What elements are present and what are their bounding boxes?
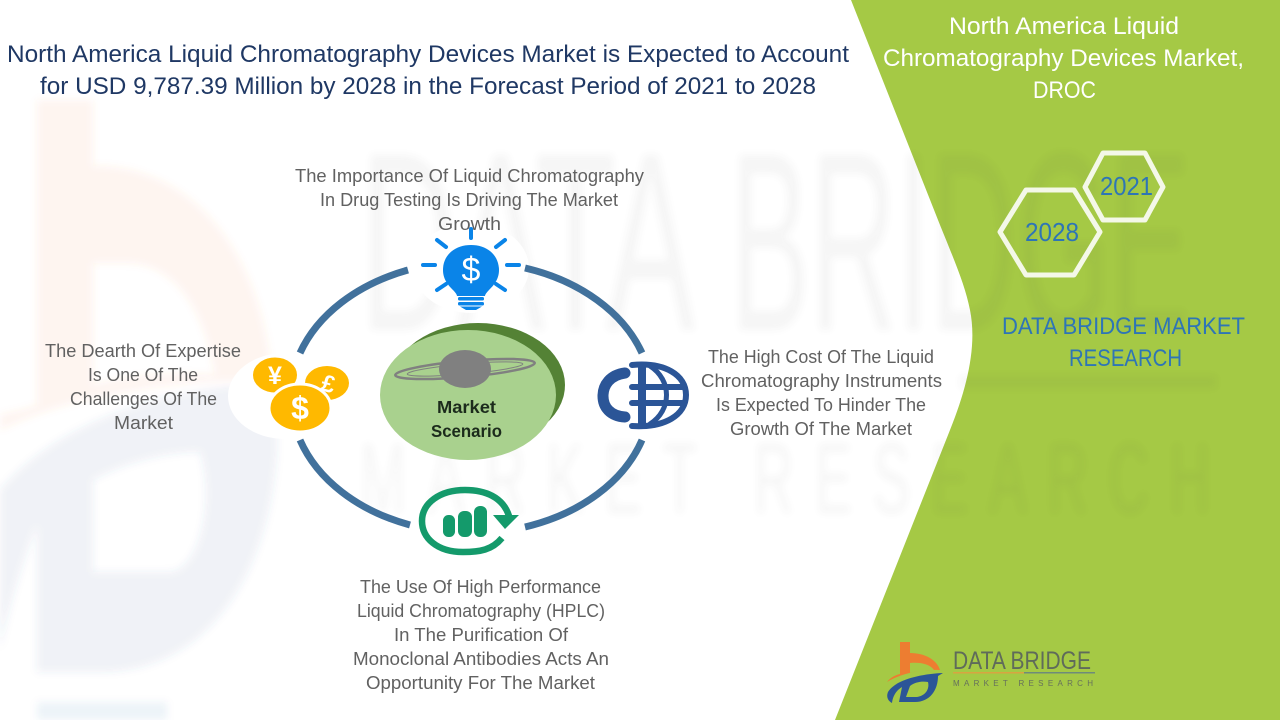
icon: coins (252, 356, 349, 432)
icon: hexagon 2028: 2028 (1025, 217, 1079, 247)
text: restraint: Is Expected To Hinder The (716, 395, 926, 415)
text: opportunity: The Use Of High Performance (360, 577, 601, 597)
company name text: DATA BRIDGE MARKET (1002, 313, 1245, 340)
icon: light bulb with dollar (423, 229, 519, 310)
text: opportunity: In The Purification Of (394, 625, 569, 645)
center: market scenario (380, 323, 565, 460)
watermark: company name (360, 100, 1216, 535)
icon: planet (395, 350, 535, 388)
watermark: large logo (0, 100, 277, 720)
text: opportunity: Opportunity For The Market (366, 673, 595, 693)
text: restraint: The High Cost Of The Liquid (708, 347, 934, 367)
text: restraint: Chromatography Instruments (701, 371, 942, 391)
text: opportunity (353, 577, 609, 693)
text: driver (295, 166, 644, 234)
icon: light bulb with dollar: $ (462, 251, 481, 289)
title (7, 41, 849, 100)
icon: phone and globe (603, 365, 686, 426)
icon: hexagon 2021: 2021 (1100, 171, 1153, 201)
white blob: icon backgrounds (228, 223, 697, 439)
logo: data bridge: DATA BRIDGE (953, 647, 1091, 675)
icon: chart with circular arrow (422, 490, 519, 552)
text: restraint (701, 347, 942, 439)
label: market scenario (431, 397, 502, 441)
text: challenge: Is One Of The (88, 365, 198, 385)
watermark: company name: MARKET RESEARCH (360, 424, 1210, 535)
text: driver: The Importance Of Liquid Chromatography (295, 166, 644, 186)
side panel heading: Chromatography Devices Market, (883, 45, 1244, 72)
text: challenge: Market (114, 413, 173, 433)
icon: coins: ¥ (268, 362, 282, 390)
icon: coins: £ (318, 370, 339, 399)
text: opportunity: Liquid Chromatography (HPLC) (357, 601, 605, 621)
ring: segmented ellipse (300, 268, 642, 527)
text: driver: Growth (438, 214, 501, 234)
title: for USD 9,787.39 Million by 2028 in the Forecast Period of 2021 to 2028 (40, 73, 816, 100)
icon: hexagon 2021 (1085, 153, 1163, 220)
label: market scenario: Scenario (431, 421, 502, 441)
side panel heading: North America Liquid (949, 13, 1179, 40)
panel: green side panel (835, 0, 1280, 720)
watermark: company name: DATA (360, 100, 695, 385)
text: driver: In Drug Testing Is Driving The Market (320, 190, 618, 210)
logo: data bridge (887, 642, 1095, 703)
icon: hexagon 2028 (1000, 190, 1100, 275)
text: challenge: Challenges Of The (70, 389, 217, 409)
icon: coins: $ (291, 390, 309, 426)
text: challenge: The Dearth Of Expertise (45, 341, 241, 361)
logo: data bridge: MARKET RESEARCH (953, 679, 1093, 688)
title: North America Liquid Chromatography Devices Market is Expected to Account (7, 41, 849, 68)
text: restraint: Growth Of The Market (730, 419, 912, 439)
company name text: RESEARCH (1069, 345, 1182, 372)
label: market scenario: Market (437, 397, 496, 417)
text: opportunity: Monoclonal Antibodies Acts An (353, 649, 609, 669)
text: challenge (45, 341, 241, 433)
side panel heading (883, 13, 1244, 104)
company name text (1002, 313, 1245, 372)
side panel heading: DROC (1033, 77, 1096, 104)
